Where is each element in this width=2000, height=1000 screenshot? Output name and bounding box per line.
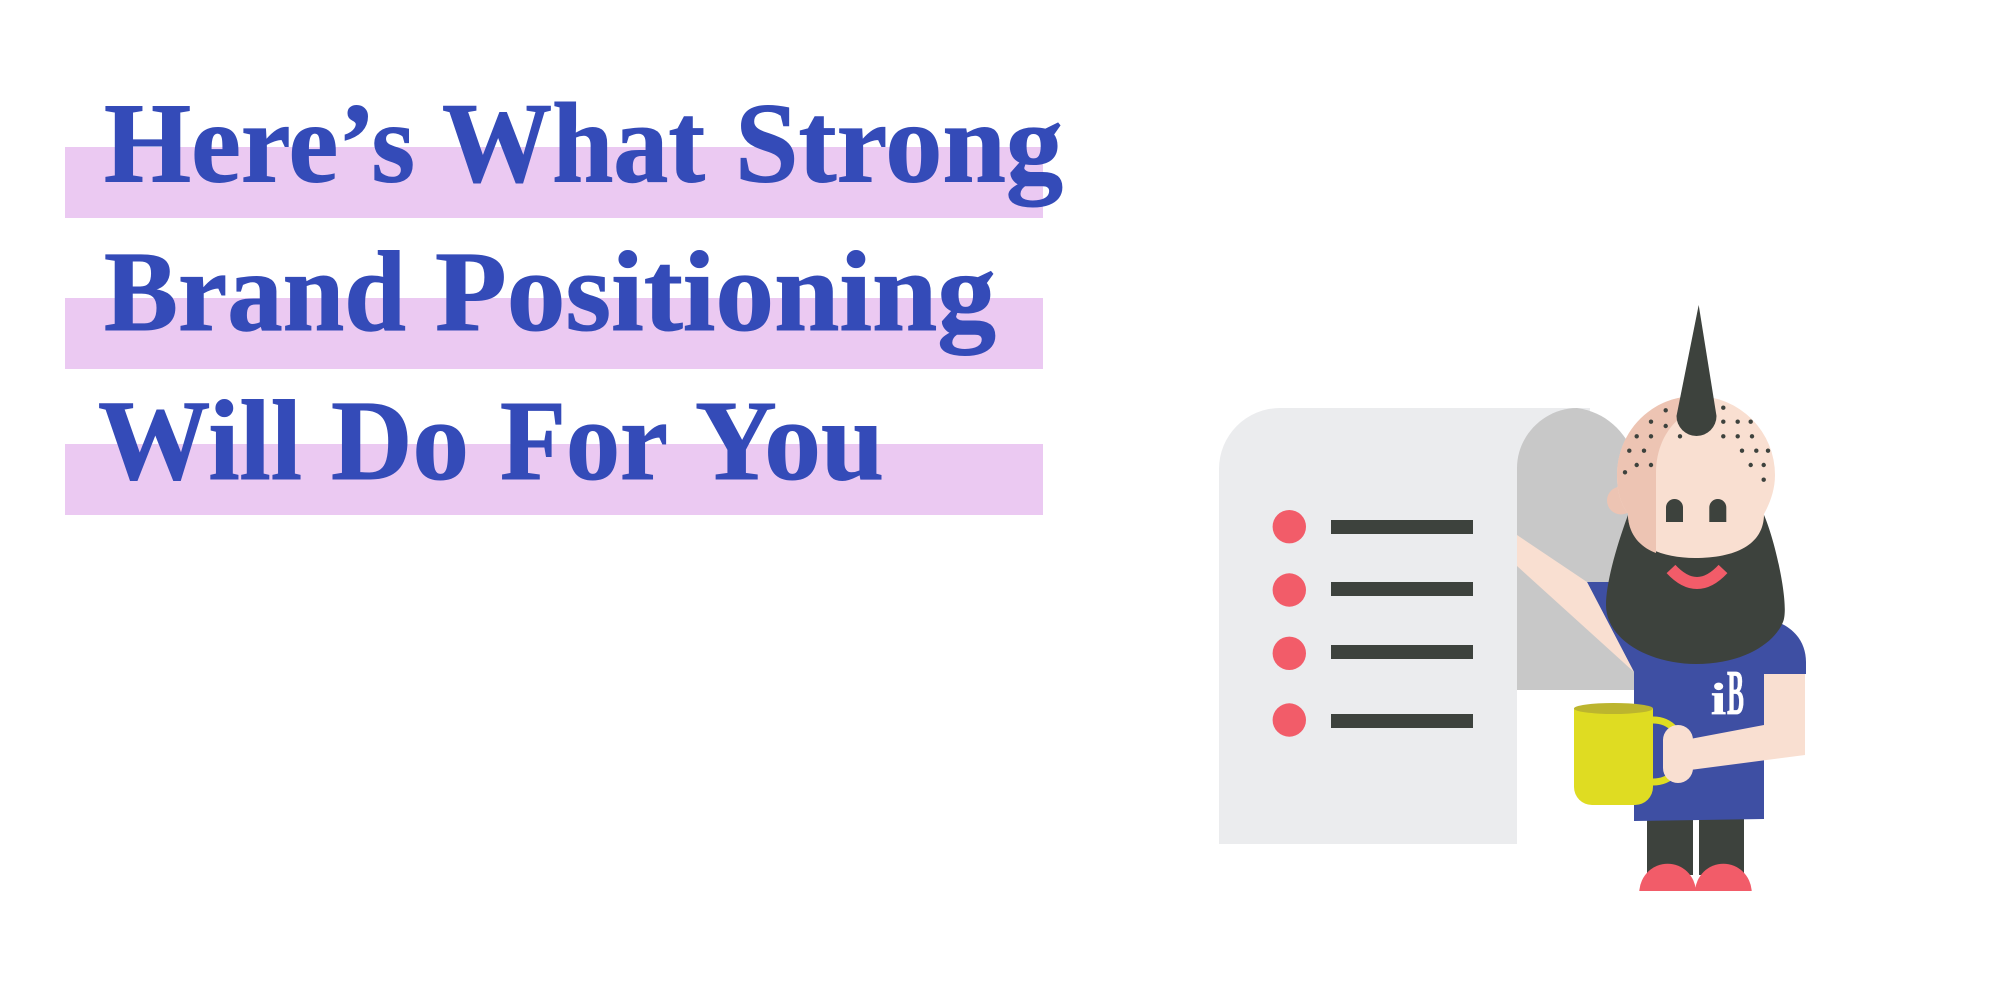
title: Strong (735, 80, 1063, 206)
title: For (500, 377, 668, 504)
title: Brand (104, 228, 406, 355)
title (98, 80, 1063, 504)
illustration: checklist and bearded man: B (1727, 657, 1744, 728)
t-shirt logo (1711, 657, 1744, 728)
mug handle (1653, 720, 1682, 782)
highlight bar: line 2 (65, 298, 1043, 369)
paper curl back (1517, 408, 1637, 690)
list bullets (1273, 510, 1306, 737)
legs (1647, 815, 1744, 875)
title: Will (98, 377, 302, 504)
paper checklist (1219, 408, 1590, 844)
highlight bar: line 1 (65, 147, 1043, 218)
mouth (1671, 569, 1723, 583)
mug rim (1574, 703, 1653, 714)
title: Here’s (104, 80, 415, 206)
beard (1606, 515, 1785, 664)
head shading (1617, 396, 1696, 553)
ear (1607, 486, 1635, 514)
raised arm (1517, 535, 1634, 672)
stubble dots (1623, 406, 1770, 482)
title: Positioning (435, 228, 996, 355)
title: You (695, 377, 884, 504)
list lines (1331, 520, 1473, 728)
hair spike (1676, 305, 1716, 436)
eyes (1666, 499, 1726, 522)
hand (1663, 725, 1693, 783)
t-shirt logo: i (1711, 675, 1726, 724)
t-shirt (1587, 582, 1806, 821)
title: Do (331, 377, 469, 504)
shoes (1639, 864, 1752, 891)
highlight bar: line 3 (65, 444, 1043, 515)
holding arm (1690, 674, 1805, 770)
illustration: checklist and bearded man (1219, 305, 1806, 891)
mug (1574, 708, 1653, 805)
head (1617, 396, 1775, 558)
title: What (442, 80, 705, 206)
